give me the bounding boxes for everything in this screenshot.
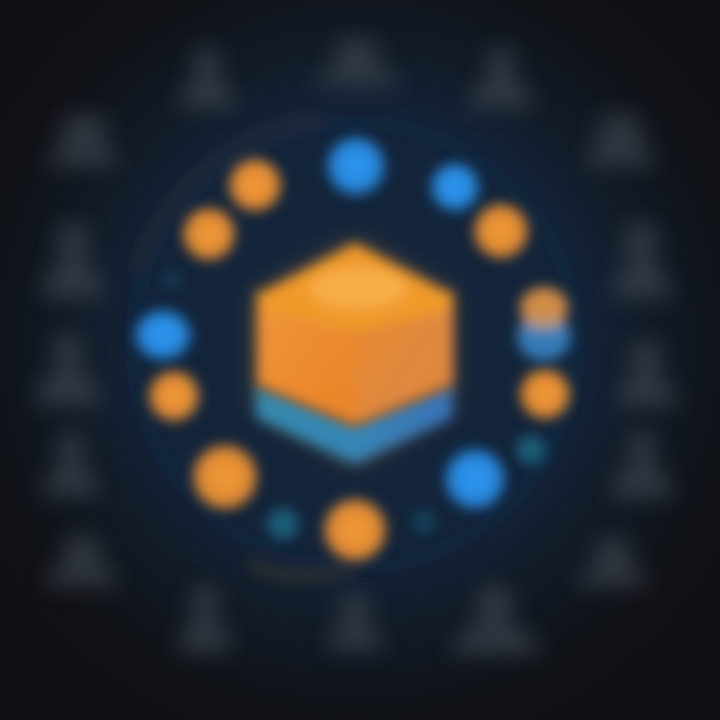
ring: faint orbit xyxy=(133,118,577,576)
small teal dots xyxy=(162,270,546,540)
split node xyxy=(517,287,571,361)
person bottom left xyxy=(178,585,232,652)
person right 3 xyxy=(610,431,674,498)
person upper right xyxy=(584,114,656,166)
blue nodes xyxy=(135,137,505,509)
person left 1 xyxy=(42,223,104,298)
person upper left xyxy=(48,114,120,166)
people icons: outer ring xyxy=(34,38,678,654)
person bottom right xyxy=(450,585,542,654)
cube base xyxy=(256,385,452,464)
person left 3 xyxy=(42,433,100,496)
person lower right xyxy=(576,537,650,586)
person right 2 xyxy=(616,340,678,406)
cube faces xyxy=(257,243,453,426)
central cube xyxy=(255,240,453,465)
person right 1 xyxy=(612,222,672,298)
person left 2 xyxy=(34,334,102,405)
person top centre xyxy=(312,38,402,86)
person top right xyxy=(468,47,534,108)
person top left xyxy=(178,47,236,108)
cube glow xyxy=(255,240,452,465)
orange nodes xyxy=(149,159,570,561)
person bottom centre xyxy=(326,593,384,650)
person lower left xyxy=(44,535,120,586)
